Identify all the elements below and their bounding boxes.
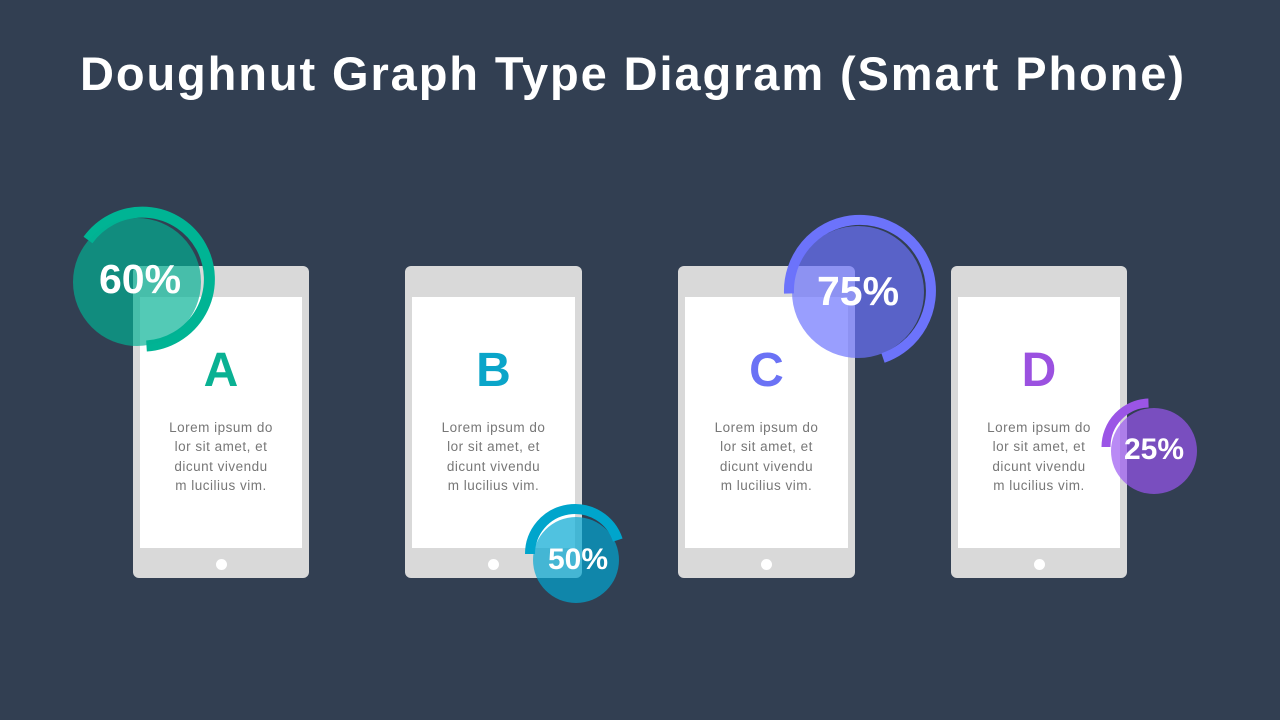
phone C: C xyxy=(749,344,784,397)
phone C: dicunt vivendu xyxy=(720,459,813,474)
phone D: m lucilius vim. xyxy=(993,478,1085,493)
doughnut: 75%: 75% xyxy=(817,268,899,314)
phone A: lor sit amet, et xyxy=(175,439,267,454)
doughnut: 60% xyxy=(73,212,209,346)
phone A: dicunt vivendu xyxy=(174,459,268,474)
phone A xyxy=(133,266,309,578)
phone D: Lorem ipsum do xyxy=(987,420,1091,435)
phone A: m lucilius vim. xyxy=(175,478,267,493)
doughnut: 50% xyxy=(530,509,619,603)
phone B xyxy=(405,266,582,578)
doughnut: 25% xyxy=(1106,403,1197,494)
phone C xyxy=(678,266,855,578)
phone A: Lorem ipsum do xyxy=(169,420,273,435)
phone B: lor sit amet, et xyxy=(447,439,540,454)
doughnut: 25%: 25% xyxy=(1124,433,1184,466)
doughnut: 60%: 60% xyxy=(99,256,181,302)
phone A: A xyxy=(204,344,238,397)
phone C: Lorem ipsum do xyxy=(715,420,818,435)
phone B: Lorem ipsum do xyxy=(442,420,545,435)
doughnut: 50%: 50% xyxy=(548,543,608,576)
phone D: D xyxy=(1022,344,1056,397)
doughnut: 75% xyxy=(789,220,931,358)
phone D xyxy=(951,266,1127,578)
phone C: m lucilius vim. xyxy=(721,478,812,493)
phone B: B xyxy=(476,344,511,397)
title: Doughnut Graph Type Diagram (Smart Phone) xyxy=(80,47,1186,100)
phone B: m lucilius vim. xyxy=(448,478,539,493)
phone C: lor sit amet, et xyxy=(720,439,813,454)
phone D: dicunt vivendu xyxy=(992,459,1086,474)
phone D: lor sit amet, et xyxy=(993,439,1085,454)
phone B: dicunt vivendu xyxy=(447,459,540,474)
